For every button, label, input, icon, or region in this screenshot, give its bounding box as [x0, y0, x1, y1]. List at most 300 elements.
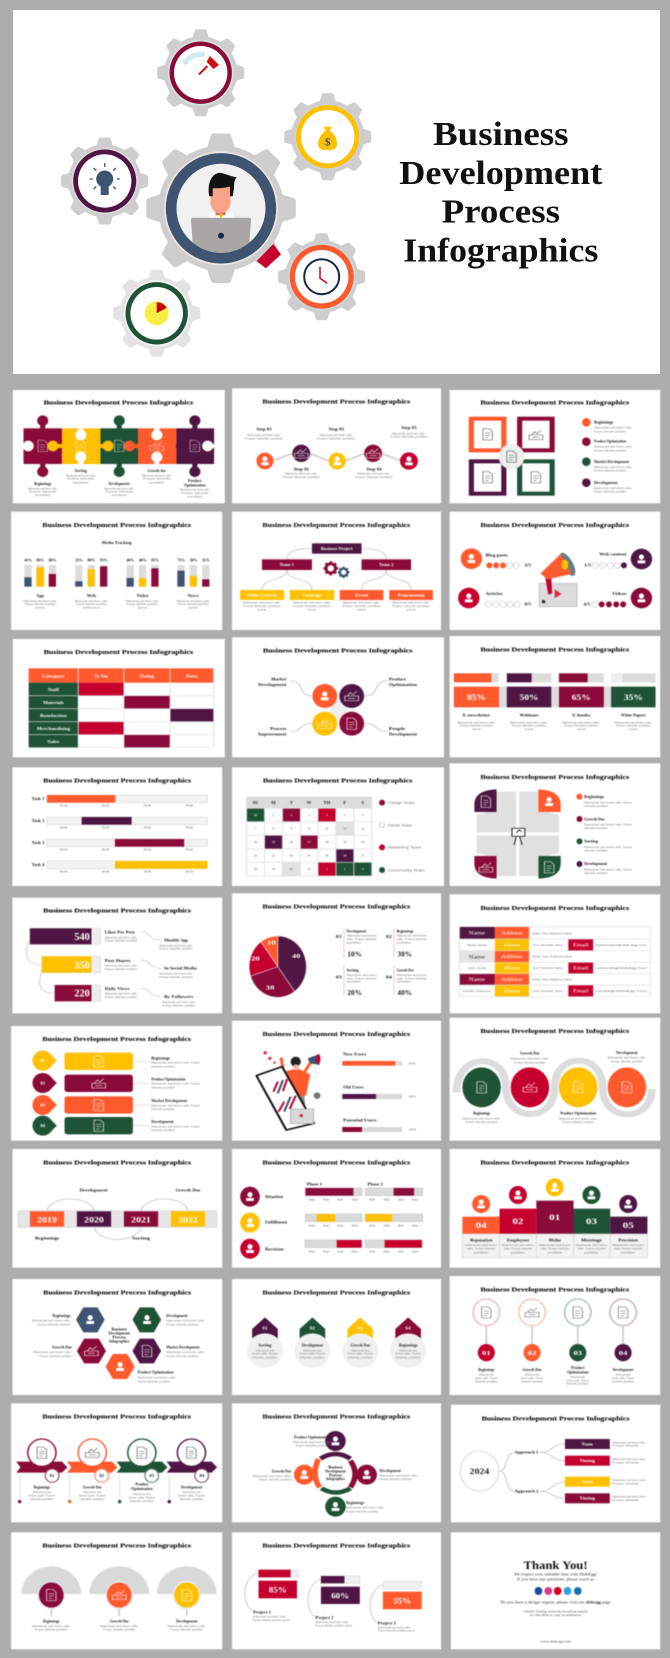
bar chart — [342, 1052, 416, 1132]
labels: Development — [181, 1485, 203, 1489]
labels: Fusce lobortis porttitor purus — [315, 1624, 352, 1627]
panel: serpentine circles — [450, 1018, 660, 1141]
labels: Market — [271, 677, 287, 682]
labels: Fusce lobortis porttitor — [514, 1061, 547, 1065]
calendar: 1 — [326, 867, 328, 871]
panel: four circle quadrant — [232, 637, 444, 757]
labels: porttitor — [187, 495, 204, 498]
gantt chart: 00:00 — [144, 804, 152, 808]
labels: Product — [135, 1482, 149, 1486]
description table: Maecenas sed lorem — [612, 1243, 644, 1247]
labels: Maecenas sed — [182, 1490, 200, 1494]
gantt bars — [305, 1182, 423, 1254]
body text: Fusce lobortis — [612, 1498, 639, 1502]
labels: purus — [629, 727, 638, 731]
labels: Maecenas sed lorem odio. — [28, 487, 58, 490]
panel: contact table — [450, 894, 660, 1013]
panel: year timeline — [12, 1149, 222, 1268]
calendar: 23 — [290, 854, 294, 858]
project cards: 85% — [269, 1586, 287, 1595]
table: Email — [573, 966, 589, 971]
row 6 of slide thumbnails — [11, 1018, 660, 1141]
icon: money bag gear — [284, 93, 371, 180]
legend: Maecenas sed lorem odio. — [594, 465, 633, 469]
table: Your Number Here — [532, 966, 563, 970]
labels: Fusce lobortis porttitor — [562, 1120, 595, 1124]
heading: Business Development Process Infographics — [43, 1158, 191, 1166]
heading: Business Development Process Infographics — [43, 1288, 191, 1296]
table: Materials — [43, 701, 64, 705]
percent cards: 50% — [520, 693, 539, 703]
tree chart: Timing — [579, 1459, 596, 1463]
labels: lobortis porttitor — [300, 1356, 326, 1359]
center text — [325, 1465, 346, 1481]
connectors — [27, 932, 162, 997]
table: Name — [469, 955, 486, 960]
table: Write Your Address Here — [532, 978, 572, 981]
calendar: 7 — [255, 827, 257, 830]
body text: purus — [258, 608, 267, 611]
heading: Business Development Process Infographics — [42, 1035, 191, 1043]
icon: light bulb gear — [61, 138, 148, 224]
labels: purus — [188, 606, 198, 609]
gantt chart: 00:00 — [144, 870, 152, 874]
calendar: W — [307, 801, 312, 805]
labels: Fusce lobortis porttitor — [245, 437, 284, 440]
stat blocks: odio. Fusce lobortis — [347, 977, 377, 980]
labels: Maecenas sed lorem odio. — [180, 488, 210, 492]
labels: lorem odio. Fusce — [79, 1494, 106, 1497]
title: Business — [433, 116, 569, 153]
bar chart: 95% — [100, 558, 108, 562]
labels: E-books — [572, 713, 591, 718]
body text: Fusce lobortis porttitor — [243, 604, 282, 608]
gantt bars: Start — [384, 1198, 390, 1202]
labels: lorem odio. Fusce — [347, 1352, 373, 1356]
gantt chart: 00:00 — [60, 870, 68, 874]
gantt bars: Phase 1 — [307, 1182, 322, 1187]
labels: Growth Due — [350, 1343, 370, 1348]
calendar: 1 — [273, 813, 275, 817]
table: Sales — [47, 740, 60, 744]
percent cards: 35% — [624, 693, 643, 703]
labels: Maecenas sed lorem odio. — [75, 599, 108, 603]
labels: Fusce lobortis porttitor — [166, 1323, 200, 1326]
chart: gray quadrant shapes — [476, 792, 559, 876]
calendar: 6 — [362, 813, 364, 817]
percent cards: 65% — [572, 693, 591, 703]
gantt chart: Task 4 — [32, 863, 45, 867]
gantt bars: Start — [369, 1198, 376, 1202]
labels — [253, 1610, 415, 1633]
chart title: Media Tracking — [102, 541, 133, 545]
labels: porttitor — [35, 493, 52, 497]
pie chart: 10 — [267, 939, 276, 946]
center text: Development — [109, 1331, 130, 1335]
rating rows — [485, 552, 627, 607]
labels: Maecenas sed lorem odio. — [105, 992, 137, 996]
panel: arrow ribbon timeline — [11, 1403, 222, 1522]
table: Phone — [504, 966, 521, 971]
panel: 2024 approach tree — [451, 1405, 660, 1522]
labels: Project 2 — [315, 1616, 333, 1620]
icon: money bag gear: $ — [325, 137, 331, 149]
footer text: Do you have a design request, please visit our slideegg page — [500, 1600, 611, 1605]
labels — [258, 677, 418, 737]
chart: ribbon and circles — [456, 1061, 652, 1114]
labels: White Papers — [621, 713, 646, 718]
labels: Growth Due — [272, 1469, 292, 1474]
stat blocks: 10% — [347, 949, 362, 958]
labels: Fusce lobortis — [106, 490, 133, 494]
labels: Fusce lobortis porttitor — [318, 437, 356, 440]
labels: Post Shares — [105, 959, 131, 963]
labels — [35, 1188, 201, 1240]
panel: thank you — [451, 1532, 660, 1649]
tags and bars: 02 — [40, 1081, 45, 1085]
body text: Maecenas sed lorem odio. — [343, 601, 380, 605]
gantt bars: Start — [309, 1224, 315, 1227]
icon: social media row — [535, 1587, 582, 1595]
panel: category table — [13, 639, 225, 757]
labels: Fusce lobortis porttitor — [259, 1478, 292, 1481]
connectors — [133, 1061, 150, 1126]
labels: lorem odio. Fusce — [129, 1496, 155, 1500]
labels: Sorting — [132, 1236, 151, 1240]
labels: Fusce lobortis — [181, 491, 209, 495]
heading: Business Development Process Infographics — [480, 1158, 629, 1166]
labels — [29, 1482, 205, 1503]
stat blocks: Maecenas sed lorem — [347, 934, 377, 938]
stat blocks: porttitor — [347, 980, 362, 984]
row 9 of slide thumbnails — [11, 1403, 660, 1522]
labels: Product Optimization — [294, 1435, 331, 1439]
stat blocks: 20% — [347, 988, 362, 997]
description table: Meetings — [581, 1238, 602, 1242]
legend: Community Team — [388, 868, 425, 872]
gantt chart: 00:00 — [102, 848, 110, 852]
table: Doing — [140, 675, 155, 679]
body text: Maecenas sed lorem odio. — [243, 601, 281, 605]
stat blocks: 03 — [336, 975, 342, 979]
gantt bars: Start — [369, 1224, 376, 1227]
title: Infographics — [403, 233, 598, 270]
labels: Maecenas sed lorem odio. — [315, 1620, 349, 1624]
labels: lorem odio. Fusce — [395, 1352, 421, 1356]
calendar: 29 — [272, 867, 276, 871]
percent cards: 85% — [467, 693, 486, 703]
description table: Reputation — [470, 1238, 493, 1242]
stat blocks: odio. Fusce lobortis — [397, 977, 427, 980]
icons and labels: Situation — [265, 1195, 284, 1199]
pie chart: 30 — [266, 983, 275, 991]
labels: Development — [389, 732, 418, 737]
table: Cecilia Chapman — [463, 989, 491, 993]
stat blocks: porttitor — [397, 941, 412, 944]
stat blocks: odio. Fusce lobortis — [347, 937, 377, 941]
heading: Business Development Process Infographics — [480, 1027, 629, 1035]
row 4 of slide thumbnails — [12, 763, 660, 886]
labels: lorem odio. Fusce — [300, 1352, 325, 1356]
bar chart: 41% — [24, 558, 32, 562]
labels: Fusce lobortis porttitor — [346, 1510, 379, 1513]
gantt bars: Start — [384, 1250, 390, 1254]
labels: Fusce lobortis porttitor — [512, 724, 547, 728]
calendar: 16 — [290, 840, 294, 844]
labels: Maecenas sed lorem odio. — [253, 1615, 286, 1619]
labels: Maecenas sed lorem odio. — [608, 1056, 646, 1060]
body text: Fusce lobortis porttitor — [392, 604, 431, 608]
labels: Beginnings — [35, 1236, 59, 1240]
heading: Business Development Process Infographics — [480, 645, 629, 653]
legend: lobortis porttitor — [584, 804, 609, 808]
gantt chart: 00:00 — [102, 870, 110, 874]
labels: People — [389, 727, 405, 731]
gantt bars: Start — [412, 1250, 418, 1254]
org chart boxes: Business Project — [321, 547, 353, 551]
project cards: 60% — [331, 1592, 349, 1601]
labels: Step 03 — [329, 427, 344, 431]
tree chart: Approach 2 — [515, 1489, 538, 1494]
labels: Maecenas sed lorem odio. — [392, 432, 426, 435]
labels: Process — [270, 727, 287, 731]
labels: lorem odio. Fusce — [567, 1379, 589, 1382]
rating rows: Videos — [612, 592, 627, 596]
podium chart: 03 — [586, 1217, 597, 1226]
heading: Business Development Process Infographics — [262, 1158, 410, 1166]
gantt bars: Start — [412, 1224, 418, 1227]
heading: Business Development Process Infographics — [42, 1413, 191, 1420]
tags and bars — [32, 1051, 133, 1136]
labels: Maecenas sed lorem odio. — [138, 1376, 176, 1379]
labels: Growth Due — [52, 1345, 72, 1349]
icons and labels — [240, 1187, 288, 1259]
labels: Maecenas sed lorem odio. — [511, 1057, 549, 1061]
panel: four corner quadrant — [450, 763, 660, 886]
panel: calendar — [232, 767, 444, 886]
org chart boxes: Campaign — [302, 593, 322, 597]
labels: Maecenas sed lorem odio. — [105, 936, 137, 939]
labels: Fusce lobortis porttitor — [35, 1628, 68, 1631]
stat blocks: Development — [347, 929, 367, 933]
labels: Step 05 — [401, 426, 417, 430]
calendar: 22 — [272, 854, 276, 858]
number bars: 540 — [74, 932, 90, 943]
table: Cecilia@SlideEgg Com — [595, 989, 647, 993]
labels: Web — [87, 594, 97, 598]
labels: Fusce lobortis porttitor — [171, 1628, 204, 1631]
gantt chart: Task 1 — [32, 797, 44, 801]
labels — [105, 930, 198, 1007]
labels: Project 3 — [378, 1621, 396, 1625]
gantt bars: Start — [398, 1250, 404, 1254]
body text: Fusce lobortis porttitor — [343, 604, 381, 608]
labels: Fusce lobortis porttitor — [379, 1477, 413, 1481]
gantt bars: Start — [412, 1198, 418, 1202]
gantt bars: Start — [309, 1198, 315, 1202]
labels: Fusce lobortis porttitor purus — [378, 1629, 415, 1633]
labels: lobortis porttitor — [151, 1065, 176, 1068]
description table: porttitor — [511, 1251, 526, 1254]
calendar: T — [290, 801, 293, 805]
calendar: 10 — [307, 827, 311, 830]
calendar: 9 — [291, 827, 293, 830]
tags and bars: 03 — [40, 1103, 45, 1107]
description table: porttitor — [621, 1251, 637, 1254]
legend: Beginnings — [594, 420, 614, 425]
legend: Maecenas sed lorem odio. Fusce — [584, 868, 632, 872]
labels: Fusce lobortis porttitor — [159, 975, 194, 979]
table: Name — [469, 978, 486, 983]
title: Development — [399, 155, 603, 192]
calendar: 21 — [254, 854, 258, 858]
labels: lobortis porttitor — [348, 1356, 374, 1359]
center text: Process — [112, 1335, 126, 1340]
labels: lobortis porttitor — [151, 1086, 176, 1089]
rating rows: Web content — [599, 552, 627, 557]
labels: Fusce lobortis porttitor — [38, 1323, 71, 1326]
body text: Maecenas sed lorem odio. — [293, 601, 331, 605]
icons and labels: Revision — [265, 1247, 285, 1251]
heading: Business Development Process Infographics — [262, 1542, 410, 1549]
bar chart: 75% — [177, 558, 185, 562]
tree chart — [460, 1439, 610, 1503]
heading: Business Development Process Infographics — [42, 1542, 191, 1549]
connectors — [291, 681, 387, 732]
labels: Maecenas sed lorem odio. Fusce — [151, 1061, 200, 1065]
labels: lobortis porttitor — [130, 1499, 155, 1503]
podium chart: 04 — [476, 1221, 487, 1230]
labels: Beginnings — [34, 1485, 50, 1489]
row 8 of slide thumbnails — [12, 1276, 660, 1395]
labels: porttitor — [73, 481, 90, 484]
labels: Fusce lobortis porttitor — [105, 995, 138, 999]
labels: Development — [79, 1188, 108, 1192]
gantt chart: 00:00 — [60, 848, 68, 852]
table: Name — [469, 931, 486, 936]
table: Your Number Here — [532, 943, 563, 947]
labels: Development — [258, 683, 287, 687]
labels: Maecenas sed lorem odio. Fusce — [151, 1104, 200, 1107]
center text: Business — [112, 1327, 127, 1331]
footer text: www.slideegg.com — [540, 1640, 571, 1643]
table: Taylorhoward@slide.Egg Com — [595, 943, 647, 947]
labels: Fusce lobortis porttitor — [564, 724, 599, 728]
labels: lorem odio. Fusce — [521, 1376, 543, 1380]
gantt bars: Start — [384, 1224, 390, 1227]
connectors — [262, 548, 411, 590]
labels: Optimization — [567, 1370, 589, 1374]
gantt chart: Task 3 — [32, 841, 44, 845]
table: Merchandising — [37, 727, 71, 731]
bar chart: Potential Users — [343, 1118, 377, 1122]
panel: steps wave — [232, 388, 441, 503]
labels: Growth Due — [83, 1485, 102, 1489]
icon: speedometer gear — [157, 29, 244, 116]
colored corner icons — [474, 789, 561, 879]
legend: lobortis porttitor — [584, 871, 609, 875]
labels: lobortis porttitor — [151, 1128, 176, 1132]
podium chart: 02 — [512, 1217, 524, 1226]
stat blocks: porttitor — [397, 980, 412, 984]
labels: Sorting — [259, 1343, 272, 1348]
labels: Maecenas sed lorem odio. — [105, 964, 137, 968]
labels: Maecenas sed — [256, 1349, 274, 1352]
table: Category — [42, 675, 66, 679]
labels: lorem odio. Fusce — [178, 1494, 205, 1497]
rating rows: 3/5 — [524, 563, 531, 568]
timeline: 2020 — [84, 1215, 104, 1225]
tree chart: Team — [582, 1480, 593, 1484]
labels: Fusce lobortis porttitor — [616, 724, 651, 728]
org chart boxes: Online Contests — [247, 593, 277, 597]
labels: Growth Due — [523, 1368, 542, 1372]
rating rows: Articles — [485, 592, 503, 596]
panel: circular cycle — [232, 1403, 441, 1522]
labels: Maecenas sed lorem odio. — [159, 972, 193, 976]
body text: Fusce lobortis — [612, 1482, 639, 1485]
tree chart: Timing — [579, 1496, 596, 1501]
labels: News — [188, 594, 199, 598]
chart: four arrow caps: 03 — [358, 1326, 364, 1330]
labels: Fusce lobortis porttitor — [466, 1120, 498, 1124]
stat blocks: Maecenas sed lorem — [347, 973, 377, 977]
bar chart: Old Users — [343, 1085, 364, 1090]
labels: Maecenas sed lorem odio. — [559, 1117, 597, 1120]
center text: Infographics — [326, 1477, 345, 1481]
panel: tag list — [11, 1026, 222, 1141]
body text — [243, 601, 431, 611]
legend: Product Optimization — [594, 439, 627, 444]
stat blocks: 02 — [386, 935, 392, 939]
labels: lobortis porttitor — [151, 1107, 176, 1111]
calendar: S — [362, 801, 365, 805]
labels: Fusce lobortis — [67, 477, 95, 481]
bar chart: 25% — [75, 558, 83, 562]
heading: Business Development Process Infographics — [262, 1288, 410, 1296]
rating rows: Blog posts — [485, 553, 508, 557]
panel: phase bars — [232, 1149, 441, 1268]
gantt chart: 00:00 — [102, 804, 110, 808]
calendar: 14 — [254, 840, 258, 844]
labels: Market Development — [151, 1099, 188, 1103]
bar chart: 80% — [88, 558, 95, 562]
labels: Development — [616, 1051, 638, 1055]
pie chart: 20 — [251, 955, 260, 962]
labels: Fusce lobortis porttitor — [39, 1354, 73, 1358]
description table: odio. Fusce lobortis — [541, 1247, 569, 1251]
labels: Maecenas — [616, 1373, 631, 1377]
podium chart: 01 — [549, 1213, 561, 1222]
labels: purus — [577, 727, 586, 731]
labels: Fusce lobortis porttitor purus — [253, 1618, 290, 1622]
timeline: 2019 — [37, 1215, 57, 1225]
legend: lobortis porttitor — [584, 849, 609, 852]
heading: Business Development Process Infographics — [263, 777, 412, 784]
row 2 of slide thumbnails — [11, 512, 660, 630]
labels: Product — [571, 1366, 585, 1370]
bar chart: 40% — [126, 558, 134, 562]
legend: Media Team — [388, 823, 412, 827]
labels: E-newsletter — [463, 713, 490, 718]
center text: Business — [328, 1465, 343, 1470]
labels: Beginnings — [53, 1314, 71, 1318]
gantt bars: Start — [398, 1224, 404, 1227]
heading: Business Development Process Infographics — [262, 397, 410, 405]
labels — [475, 1366, 635, 1386]
labels: Fusce lobortis porttitor — [127, 602, 158, 606]
labels: In Social Media — [164, 966, 198, 971]
